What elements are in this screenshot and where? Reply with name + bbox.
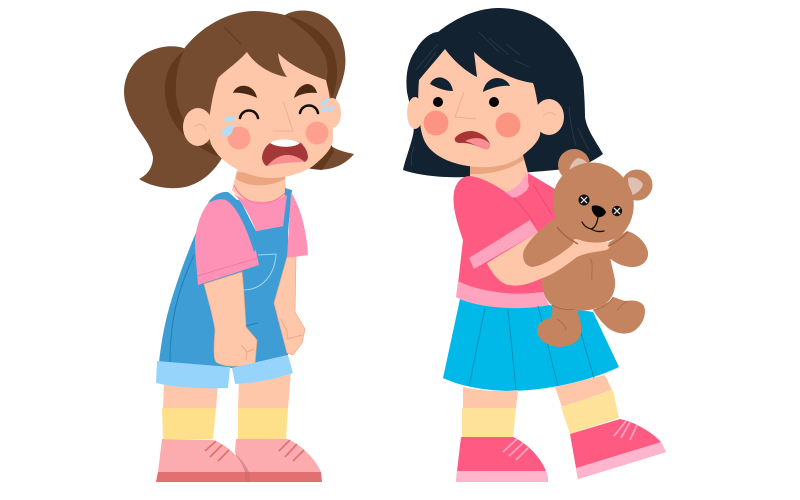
hair strand bbox=[224, 27, 241, 44]
bear body bbox=[542, 235, 615, 310]
angry girl with teddy bear bbox=[403, 8, 666, 482]
bear left leg bbox=[537, 304, 581, 347]
bear left ear bbox=[558, 149, 590, 181]
hair shadow left bbox=[165, 51, 222, 156]
neck bbox=[470, 155, 528, 195]
bear head bbox=[553, 162, 634, 243]
bear mouth bbox=[582, 217, 604, 232]
nose bbox=[455, 92, 476, 119]
black hair bbox=[403, 8, 603, 177]
shirt hem bbox=[456, 281, 549, 309]
cheeks bbox=[424, 110, 448, 136]
neck bbox=[232, 170, 286, 203]
dress seam bbox=[170, 255, 194, 362]
left ear bbox=[183, 108, 213, 146]
bear right leg bbox=[593, 297, 645, 334]
shorts cuffs bbox=[156, 361, 230, 388]
button eyes bbox=[578, 194, 622, 216]
left ponytail bbox=[124, 46, 222, 188]
socks bbox=[462, 408, 516, 437]
eyebrows bbox=[233, 84, 317, 98]
overall strap bbox=[208, 192, 258, 252]
left leg bbox=[463, 387, 518, 408]
socks bbox=[162, 408, 216, 439]
left shoe bbox=[456, 437, 548, 482]
crying girl bbox=[124, 10, 354, 482]
pink shirt bbox=[453, 173, 575, 296]
neck shadow bbox=[236, 172, 285, 185]
left shoe bbox=[156, 439, 250, 482]
bear nose bbox=[592, 205, 606, 217]
left ear bbox=[407, 97, 423, 129]
shirt sleeve bbox=[195, 194, 259, 285]
eyes bbox=[433, 97, 443, 107]
right shoe bbox=[570, 419, 666, 479]
pocket bbox=[243, 254, 276, 290]
right shoe bbox=[235, 439, 322, 482]
face bbox=[418, 49, 541, 167]
cheeks bbox=[228, 126, 250, 150]
mouth bbox=[455, 131, 490, 149]
bear right ear bbox=[622, 170, 652, 200]
right leg bbox=[555, 375, 612, 407]
teddy bear bbox=[487, 149, 652, 347]
girl's arm holding bear bbox=[487, 232, 610, 286]
sleeve stripe bbox=[469, 220, 538, 269]
hair shadow right bbox=[285, 15, 337, 98]
bear right arm bbox=[600, 231, 648, 267]
eyebrows bbox=[430, 77, 510, 92]
crying mouth bbox=[262, 139, 308, 166]
shirt fold bbox=[513, 184, 552, 225]
right ear bbox=[323, 98, 341, 128]
back arm bbox=[274, 257, 305, 355]
closed eyes bbox=[240, 106, 318, 118]
hair back bbox=[175, 10, 354, 170]
bear creases bbox=[552, 258, 628, 330]
pink shirt bbox=[228, 189, 287, 231]
overall dress bbox=[159, 188, 292, 368]
front arm and fist bbox=[204, 272, 302, 366]
right ear bbox=[534, 99, 564, 135]
skirt bbox=[443, 299, 619, 391]
right sleeve bbox=[287, 192, 308, 258]
legs bbox=[163, 380, 218, 410]
bear left arm bbox=[523, 216, 574, 267]
collar line bbox=[234, 185, 285, 203]
sleeve hem bbox=[197, 258, 258, 276]
hair strands bbox=[411, 32, 589, 166]
collar bbox=[505, 172, 529, 198]
tears bbox=[221, 98, 335, 136]
face bbox=[209, 52, 333, 178]
bear chin crease bbox=[557, 227, 628, 246]
neck shadow bbox=[470, 155, 524, 174]
nose bbox=[273, 102, 293, 131]
